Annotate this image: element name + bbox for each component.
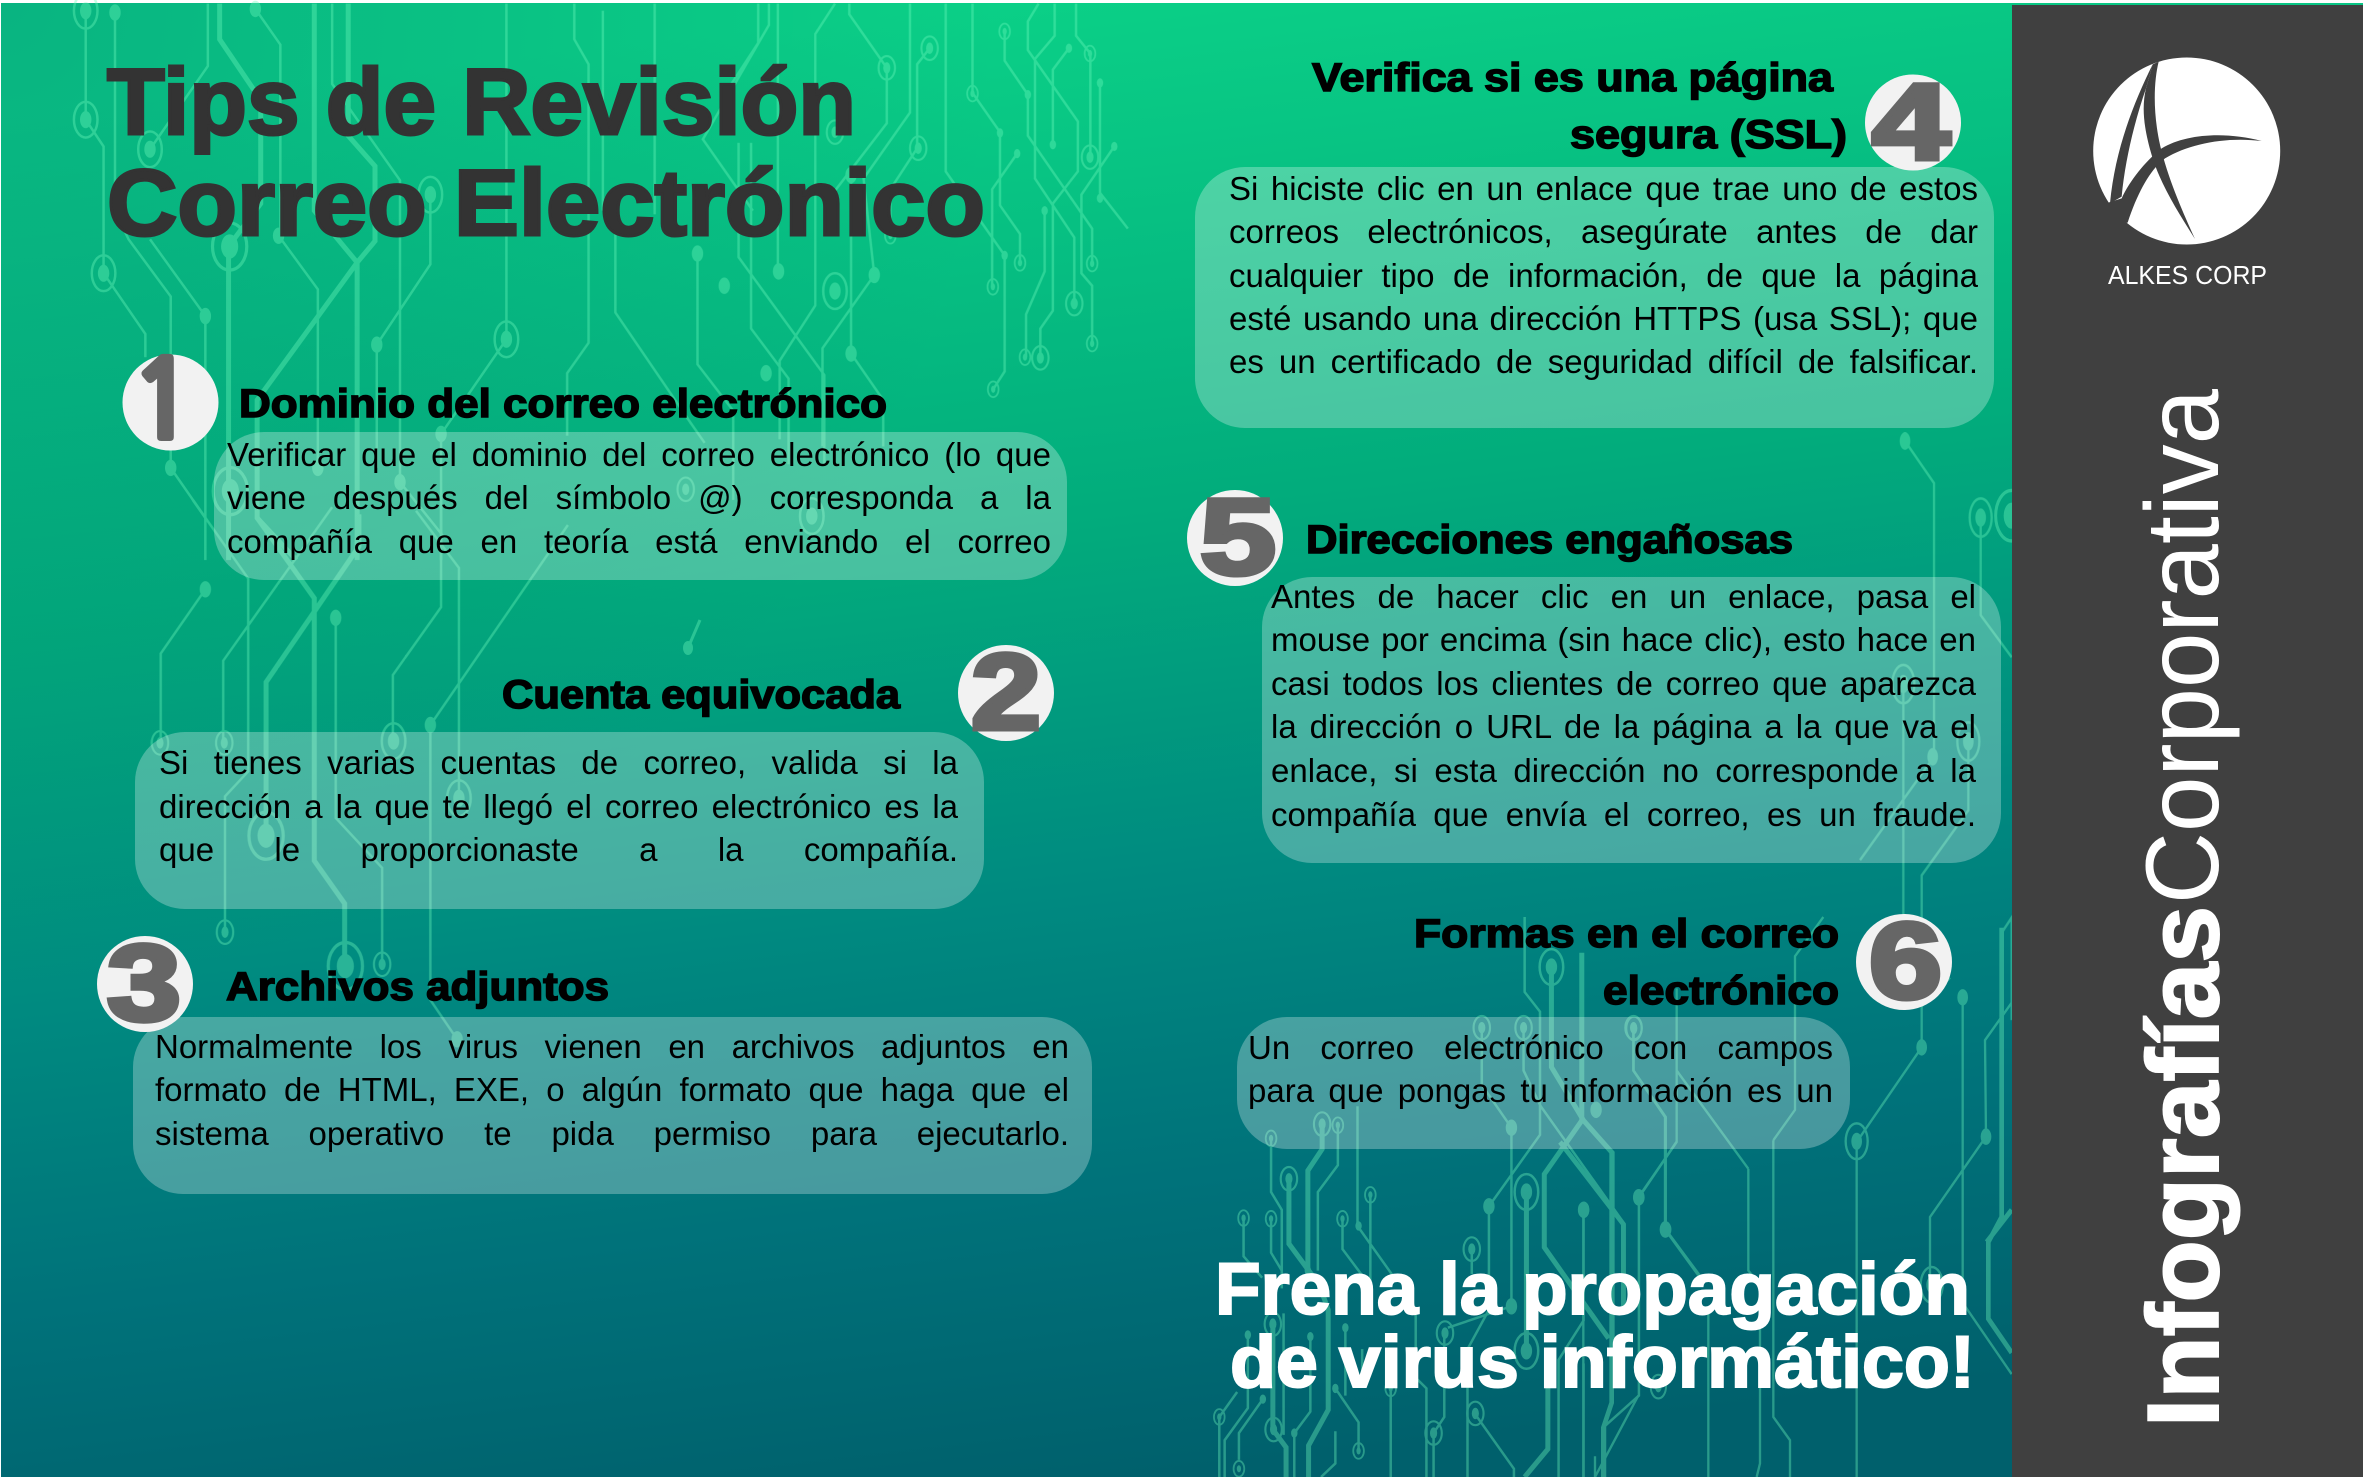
badge 2 (958, 631, 1054, 752)
badge 2: 2 (971, 631, 1041, 752)
heading 4: segura (SSL) (1570, 113, 1847, 157)
company name: ALKES CORP (2108, 260, 2267, 290)
panel 5: direcciones text: la dirección o URL de la página a la que va el (1271, 708, 1976, 745)
panel 2: cuenta text (135, 732, 984, 909)
panel 3: archivos text: Normalmente los virus vienen en archivos adjuntos en (155, 1028, 1069, 1065)
panel 4: SSL text (1195, 167, 1994, 428)
panel 3: archivos text (133, 1017, 1092, 1194)
vertical title (2125, 389, 2241, 1427)
title: Correo Electrónico (107, 150, 985, 255)
panel 1: dominio text: compañía que en teoría está enviando el correo (227, 523, 1051, 560)
panel 2: cuenta text: que le proporcionaste a la compañía. (159, 831, 958, 868)
title (107, 49, 985, 255)
heading 4: Verifica si es una página (1312, 56, 1834, 100)
panel 5: direcciones text: enlace, si esta dirección no corresponde a la (1271, 752, 1976, 789)
panel 5: direcciones text: mouse por encima (sin hace clic), esto hace en (1271, 621, 1976, 658)
badge 4: 4 (1872, 61, 1950, 182)
title: Tips de Revisión (107, 49, 856, 154)
heading 5: Direcciones engañosas (1306, 518, 1793, 562)
panel 1: dominio text: Verificar que el dominio del correo electrónico (lo que (227, 436, 1051, 473)
heading 6: electrónico (1603, 969, 1839, 1013)
sidebar panel (2012, 5, 2363, 1477)
heading 1: Dominio del correo electrónico (239, 382, 887, 426)
panel 3: archivos text: formato de HTML, EXE, o algún formato que haga que el (155, 1071, 1069, 1108)
closing call to action: Frena la propagación (1215, 1249, 1970, 1330)
panel 5: direcciones text: compañía que envía el correo, es un fraude. (1271, 796, 1976, 833)
badge 1: 1 (130, 348, 196, 455)
badge 1 (122, 348, 218, 455)
heading 3: Archivos adjuntos (226, 965, 609, 1009)
heading 6 (1414, 912, 1839, 1013)
badge 4 (1865, 61, 1961, 182)
panel 3: archivos text: sistema operativo te pida permiso para ejecutarlo. (155, 1115, 1069, 1152)
badge 3: 3 (107, 922, 181, 1043)
panel 5: direcciones text: casi todos los clientes de correo que aparezca (1271, 665, 1976, 702)
closing call to action: de virus informático! (1230, 1322, 1975, 1403)
badge 5: 5 (1200, 476, 1276, 597)
logo (2093, 58, 2280, 244)
panel 4: SSL text: cualquier tipo de información, de que la página (1229, 257, 1978, 294)
panel 6: formas text: Un correo electrónico con campos (1248, 1029, 1833, 1066)
panel 2: cuenta text: dirección a la que te llegó el correo electrónico es la (159, 788, 958, 825)
panel 4: SSL text: esté usando una dirección HTTPS (usa SSL); que (1229, 300, 1978, 337)
panel 5: direcciones text (1262, 577, 2001, 863)
badge 6 (1856, 900, 1952, 1021)
panel 2: cuenta text: Si tienes varias cuentas de correo, valida si la (159, 744, 958, 781)
heading 4 (1312, 56, 1847, 157)
heading 2: Cuenta equivocada (502, 673, 901, 717)
panel 6: formas text (1237, 1017, 1850, 1149)
panel 1: dominio text: viene después del símbolo @) corresponda a la (227, 479, 1051, 516)
panel 6: formas text: para que pongas tu información es un (1248, 1072, 1833, 1109)
panel 4: SSL text: correos electrónicos, asegúrate antes de dar (1229, 213, 1978, 250)
vertical title: Corporativa (2125, 389, 2241, 904)
vertical title: Infografías (2128, 906, 2240, 1427)
panel 5: direcciones text: Antes de hacer clic en un enlace, pasa el (1271, 578, 1976, 615)
badge 6: 6 (1869, 900, 1942, 1021)
badge 5 (1187, 476, 1283, 597)
heading 6: Formas en el correo (1414, 912, 1839, 956)
closing call to action (1215, 1249, 1975, 1403)
panel 1: dominio text (214, 432, 1067, 580)
badge 3 (97, 922, 193, 1043)
panel 4: SSL text: Si hiciste clic en un enlace que trae uno de estos (1229, 170, 1978, 207)
panel 4: SSL text: es un certificado de seguridad difícil de falsificar. (1229, 343, 1978, 380)
